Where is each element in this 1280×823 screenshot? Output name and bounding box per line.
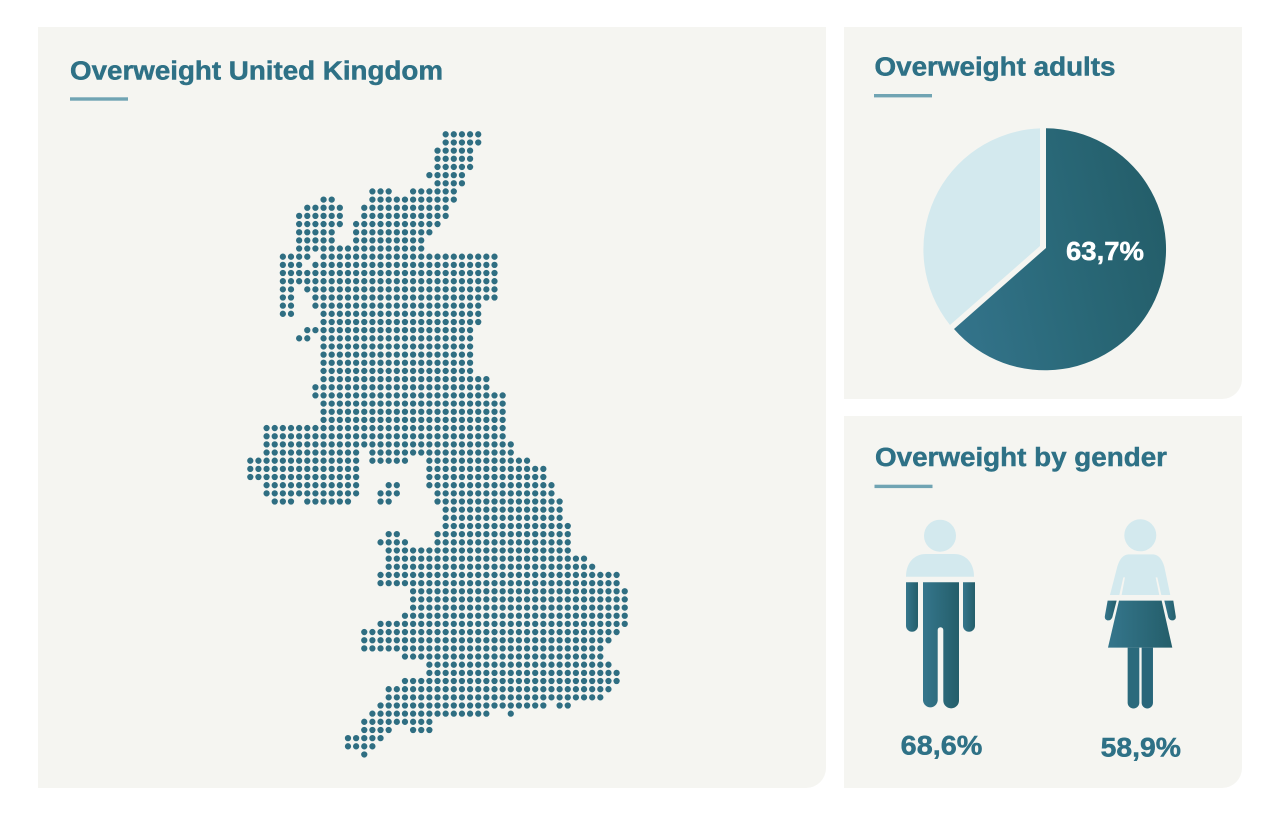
heading: overweight united kingdom: Overweight United Kingdom <box>70 58 443 86</box>
panel: overweight adults <box>844 27 1242 399</box>
heading: overweight adults: Overweight adults <box>874 54 1116 82</box>
icon: man <box>906 520 975 708</box>
panel: overweight by gender <box>844 416 1242 788</box>
value: men 68,6%: 68,6% <box>901 730 982 760</box>
pie slice: 63,7% <box>954 128 1166 370</box>
heading underline: map panel <box>70 97 128 101</box>
heading underline: gender panel <box>874 485 932 488</box>
dot map: united kingdom <box>250 134 626 754</box>
heading: overweight by gender: Overweight by gender <box>875 444 1167 472</box>
pie value label: 63,7% <box>1066 238 1144 266</box>
value: women 58,9%: 58,9% <box>1101 732 1181 762</box>
pie slice: remainder <box>923 128 1040 325</box>
panel: overweight united kingdom <box>38 27 826 788</box>
icon: woman <box>1105 519 1176 708</box>
pie chart: overweight adults <box>923 128 1166 370</box>
heading underline: adults panel <box>874 94 932 97</box>
